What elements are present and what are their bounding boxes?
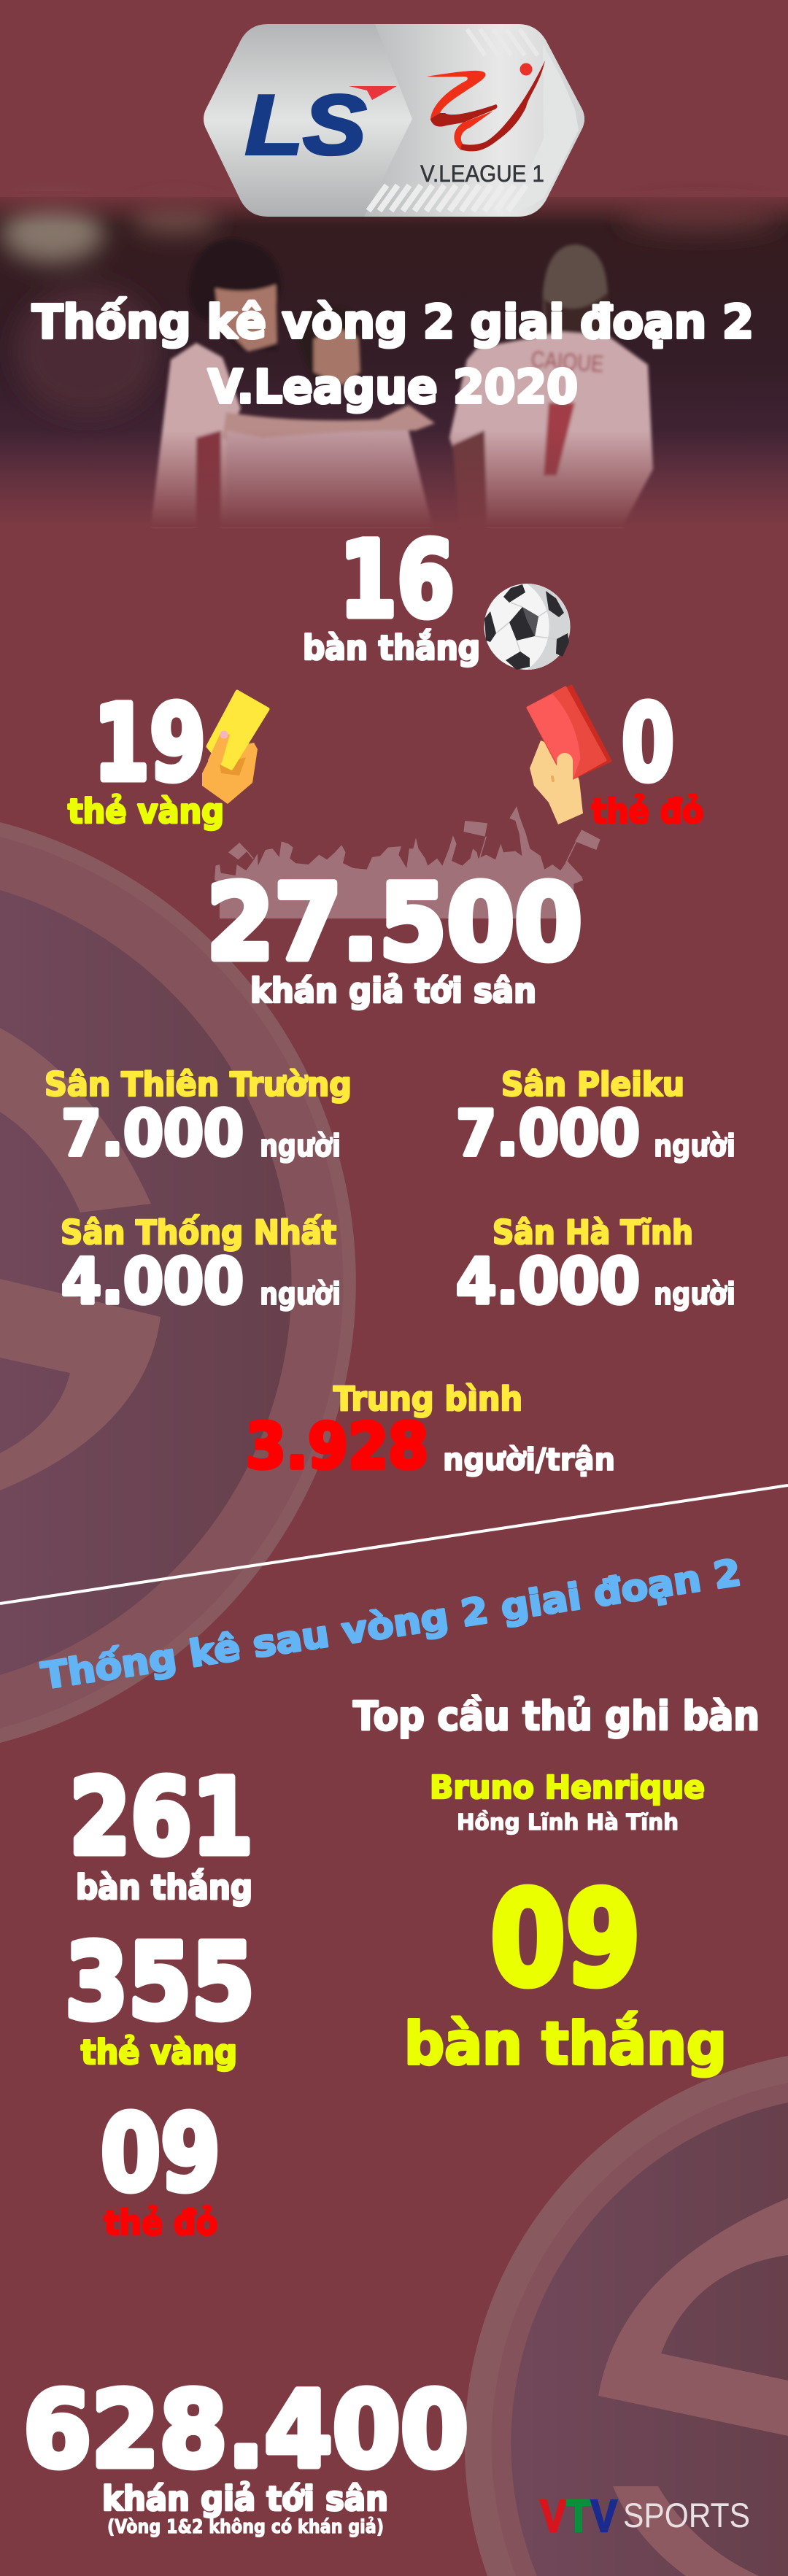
LS red accent (349, 86, 397, 100)
season stat: spectators (23, 2369, 468, 2538)
stat: average attendance (246, 1380, 615, 1483)
stat: yellow cards: 19 (93, 682, 206, 804)
stadium: Hà Tĩnh: người (654, 1276, 735, 1312)
stadium: Thiên Trường: 7.000 (61, 1097, 244, 1170)
stadium: Thống Nhất (61, 1213, 341, 1318)
top scorer heading: Top cầu thủ ghi bàn (353, 1693, 760, 1739)
season stat: spectators: 628.400 (23, 2369, 468, 2491)
stat: yellow cards (68, 682, 224, 831)
stadium: Pleiku: người (654, 1128, 735, 1164)
stadium: Thiên Trường: Sân Thiên Trường (45, 1065, 352, 1104)
stat: goals: bàn thắng (303, 628, 480, 668)
stat: spectators: khán giả tới sân (250, 971, 536, 1010)
stat: average attendance: 3.928 (246, 1410, 428, 1483)
stadium: Thống Nhất: người (260, 1276, 341, 1312)
title (32, 295, 754, 414)
goal count label: bàn thắng (404, 2010, 727, 2078)
stadium: Thống Nhất: Sân Thống Nhất (61, 1213, 336, 1252)
stat: red cards: 0 (622, 682, 674, 804)
player 2 (296, 306, 360, 379)
stadium: Hà Tĩnh: Sân Hà Tĩnh (492, 1213, 693, 1252)
logo: VTV Sports (540, 2491, 750, 2542)
title: V.League 2020 (208, 360, 578, 414)
player 3 (543, 244, 611, 347)
stat: spectators: 27.500 (206, 862, 582, 983)
stadium: Thiên Trường (45, 1065, 352, 1170)
stadium: Hà Tĩnh (456, 1213, 735, 1318)
stat: average attendance: người/trận (443, 1442, 615, 1477)
player 1 (151, 343, 241, 525)
logo: VTV Sports: SPORTS (623, 2496, 750, 2534)
header photo: three players (0, 191, 788, 527)
stadium: Thống Nhất: 4.000 (61, 1245, 244, 1318)
season stat: red cards (101, 2092, 220, 2243)
icon: crowd silhouette (215, 806, 600, 918)
stat: average attendance: Trung bình (333, 1380, 522, 1418)
season stat: yellow cards: 355 (65, 1921, 255, 2043)
season stat: goals: 261 (69, 1756, 253, 1878)
logo: VTV Sports: VTV (540, 2491, 617, 2542)
player name: Bruno Henrique (430, 1769, 705, 1806)
title: Thống kê vòng 2 giai đoạn 2 (32, 295, 754, 349)
stadium: Pleiku (456, 1065, 735, 1170)
top scorer panel (353, 1693, 760, 2078)
icon: red card in hand (528, 686, 611, 824)
section heading: after round 2: Thống kê sau vòng 2 giai đoạn 2 (39, 1551, 743, 1698)
season stat: red cards: thẻ đỏ (104, 2203, 217, 2243)
season stat: yellow cards: thẻ vàng (81, 2032, 237, 2072)
LS wordmark: LS (245, 77, 366, 172)
stadium: Pleiku: Sân Pleiku (501, 1065, 684, 1104)
background emblem: left circle (0, 822, 356, 1743)
stadium: Pleiku: 7.000 (456, 1097, 640, 1170)
stat: yellow cards: thẻ vàng (68, 792, 224, 831)
logo: LS V.League 1 badge (204, 24, 591, 217)
stat: red cards (592, 682, 703, 831)
player 3 jersey name: CAIQUE (530, 346, 605, 377)
V.League swoosh (427, 61, 545, 151)
icon: soccer ball (484, 584, 571, 670)
stat: goals: 16 (339, 519, 455, 641)
background emblem: bottom right circle (465, 2056, 788, 2576)
stat: goals (303, 519, 480, 668)
club name: Hồng Lĩnh Hà Tĩnh (457, 1810, 679, 1836)
season stat: spectators: khán giả tới sân (102, 2479, 388, 2518)
season stat: goals: bàn thắng (76, 1868, 252, 1907)
stadium: Hà Tĩnh: 4.000 (456, 1245, 640, 1318)
icon: yellow card in hand (202, 692, 268, 804)
season stat: red cards: 09 (101, 2092, 220, 2214)
stadium: Thiên Trường: người (260, 1128, 341, 1164)
goal count: 09 (490, 1864, 641, 2014)
V.League 1 wordmark: V.LEAGUE 1 (420, 160, 544, 187)
stat: red cards: thẻ đỏ (592, 792, 703, 831)
season stat: spectators: (Vòng 1&2 không có khán giả) (107, 2515, 384, 2538)
